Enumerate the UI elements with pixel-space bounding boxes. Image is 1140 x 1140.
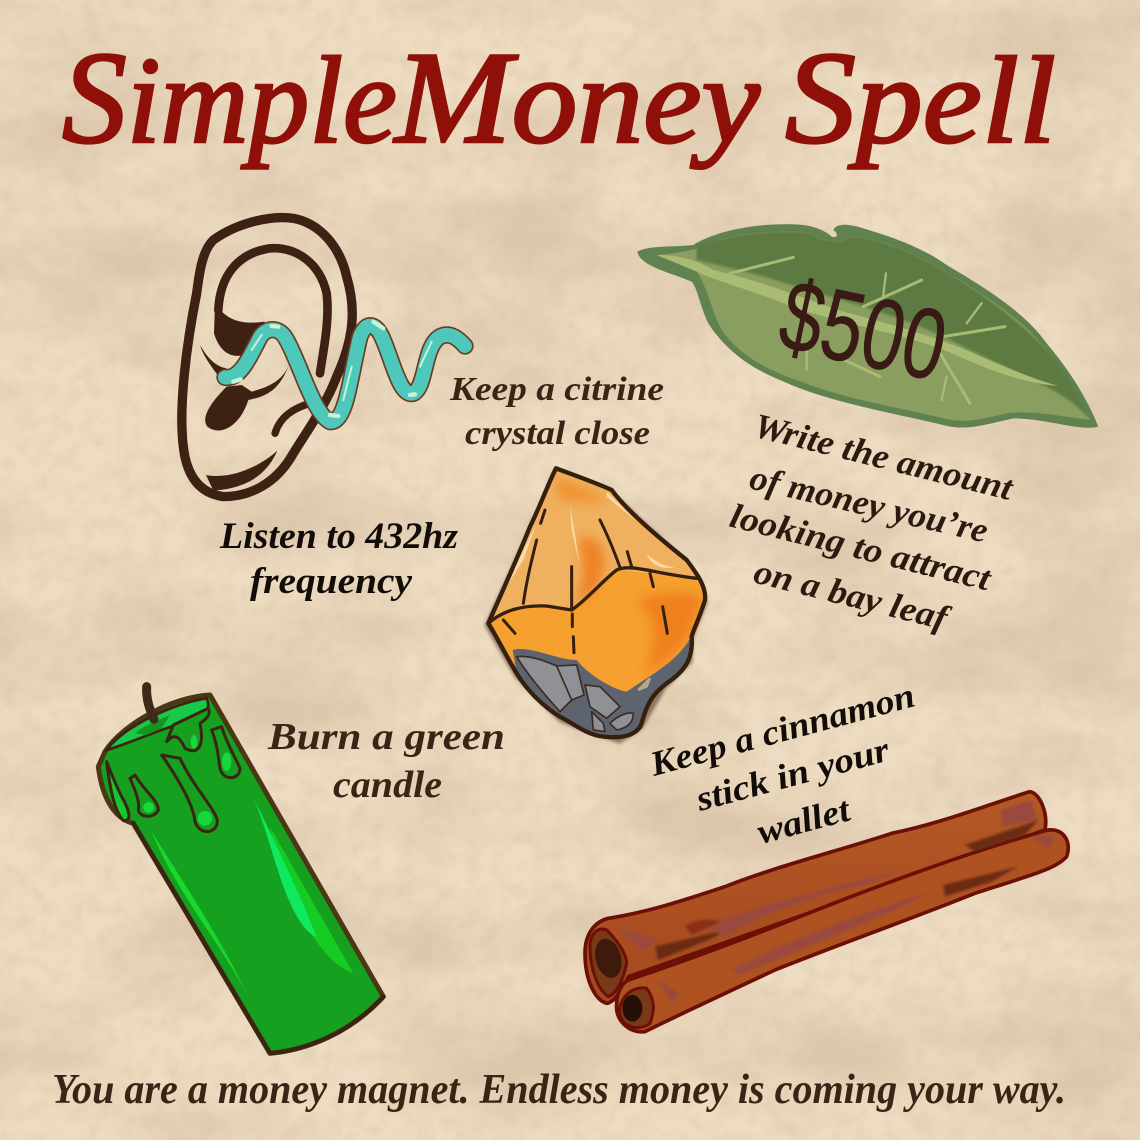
candle highlights <box>270 827 353 973</box>
icon: citrine crystal <box>484 468 708 744</box>
stick ends <box>590 929 653 1028</box>
candle body <box>98 695 383 1053</box>
candle top wax <box>107 698 208 750</box>
text: keep a citrine crystal close: crystal close <box>465 415 650 452</box>
text: keep a cinnamon stick: Keep a cinnamon <box>645 676 919 784</box>
text: listen to frequency: frequency <box>250 561 413 602</box>
text: write the amount: looking to attract <box>726 496 996 599</box>
text: burn a green candle <box>267 716 505 806</box>
title <box>62 24 1056 171</box>
crystal outline and facets <box>488 468 705 737</box>
icon: cinnamon sticks <box>585 792 1068 1032</box>
leaf shape <box>637 224 1098 428</box>
crystal colour washes <box>490 470 702 673</box>
wick <box>147 687 154 719</box>
crystal grey base <box>513 635 692 737</box>
text: write the amount: Write the amount <box>750 406 1018 508</box>
text: keep a cinnamon stick: wallet <box>753 789 855 852</box>
text: keep a citrine crystal close <box>449 371 664 452</box>
text: keep a cinnamon stick <box>645 676 919 852</box>
title: Simple <box>62 24 397 171</box>
text: listen to frequency: Listen to 432hz <box>219 516 459 557</box>
text: burn a green candle: Burn a green <box>267 716 505 758</box>
title: Money <box>393 24 761 171</box>
bark streaks <box>618 800 1055 1003</box>
text: write the amount <box>726 406 1018 639</box>
icon: ear with sound wave <box>182 218 465 497</box>
text: listen to frequency <box>219 516 459 602</box>
upper stick <box>585 792 1046 1003</box>
text: burn a green candle: candle <box>333 764 442 806</box>
lower stick <box>617 830 1068 1032</box>
icon: green candle <box>98 687 383 1053</box>
text: keep a cinnamon stick: stick in your <box>691 730 894 819</box>
icon: bay leaf with $500 <box>637 224 1098 428</box>
text: affirmation footer: You are a money magnet. Endless money is coming your way. <box>52 1067 1066 1113</box>
wax drips <box>107 708 240 832</box>
text: keep a citrine crystal close: Keep a citrine <box>449 371 664 408</box>
midrib and veins <box>657 255 1058 386</box>
text: write the amount: on a bay leaf <box>750 552 955 639</box>
leaf amount: $500 <box>771 259 956 402</box>
text: write the amount: of money you’re <box>746 458 992 550</box>
title: Spell <box>785 24 1056 171</box>
